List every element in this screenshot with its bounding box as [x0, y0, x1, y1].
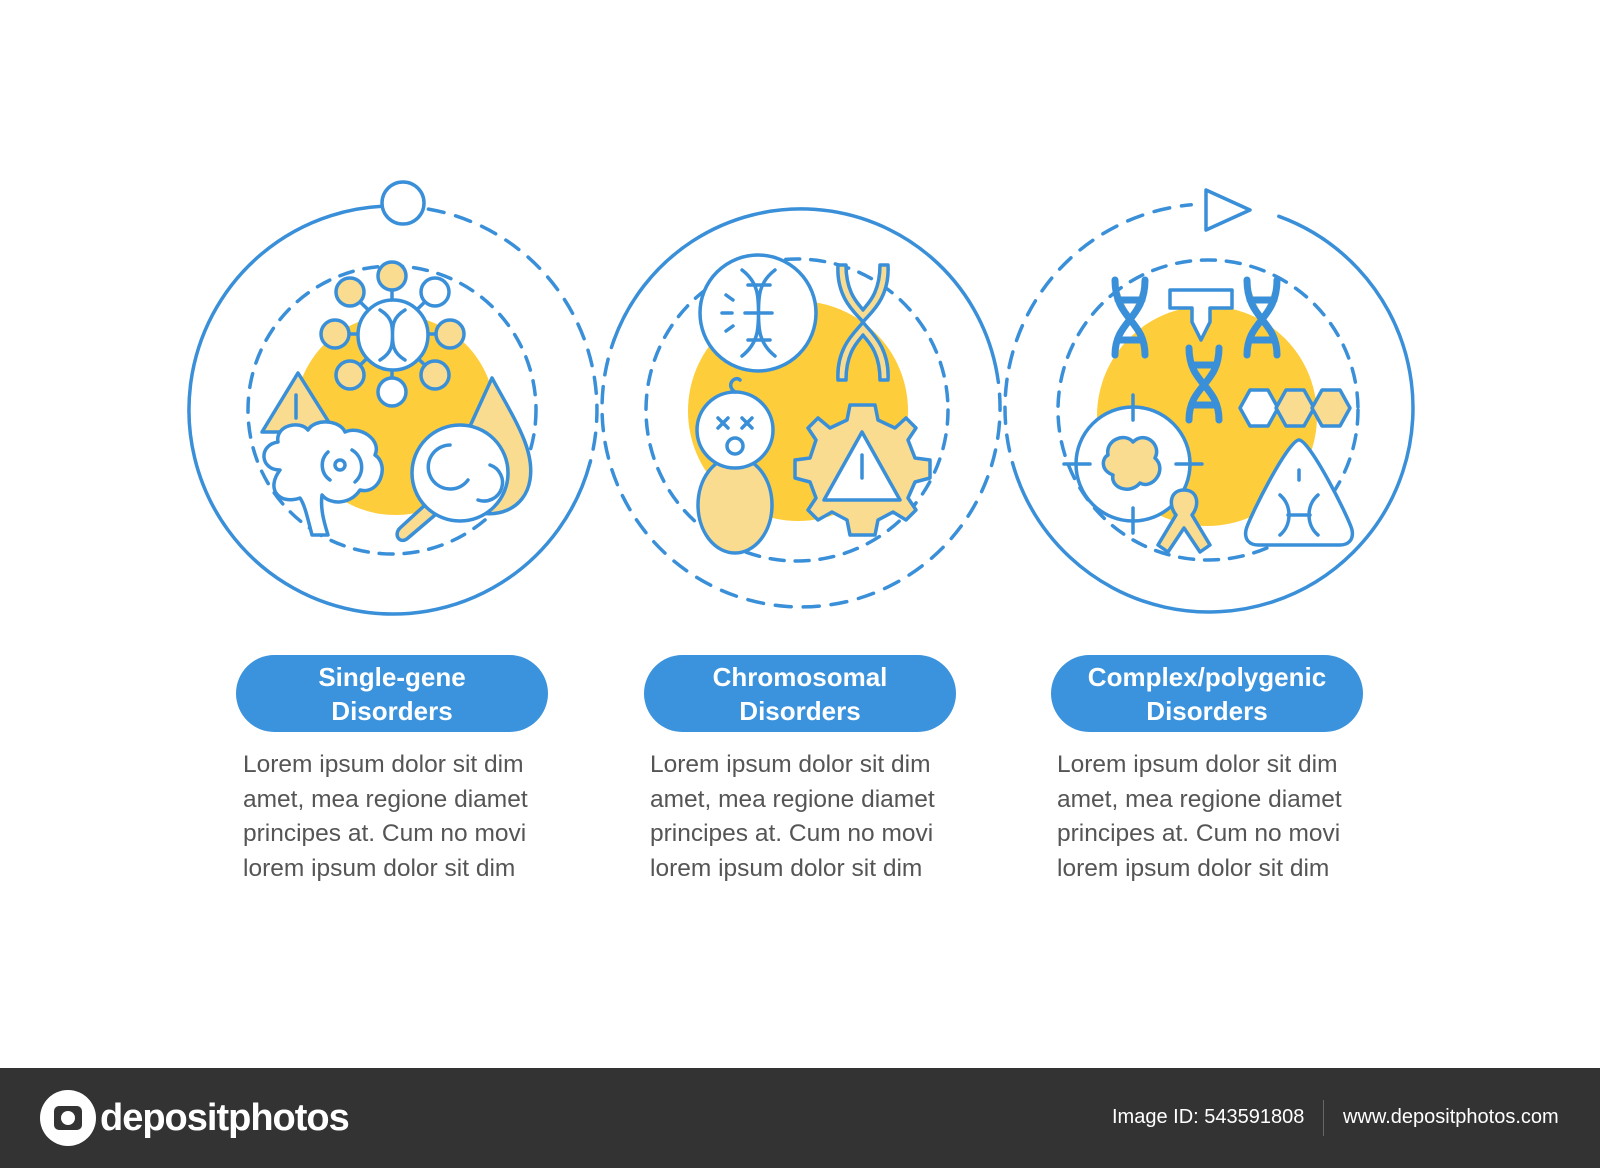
panel 3 circle	[1005, 190, 1413, 612]
logo text: depositphotos	[100, 1097, 349, 1139]
icon: baby	[697, 379, 773, 553]
pill: Single-gene Disorders: Disorders	[331, 696, 453, 726]
icon: logo camera	[40, 1090, 96, 1146]
image id: Image ID: 543591808	[1112, 1106, 1304, 1128]
icon: chromosome	[838, 265, 888, 380]
pill: Complex/polygenic Disorders: Complex/polygenic	[1088, 662, 1326, 692]
icon: DNA circle	[700, 255, 816, 371]
icon: magnifier on drop	[397, 378, 531, 540]
pill: Complex/polygenic Disorders: Disorders	[1146, 696, 1268, 726]
icon: warning and brain	[262, 373, 382, 535]
pill: Complex/polygenic Disorders	[1051, 655, 1363, 732]
pill: Single-gene Disorders: Single-gene	[318, 662, 466, 692]
icon: gene network	[321, 262, 464, 406]
pill: Chromosomal Disorders: Chromosomal	[713, 662, 887, 692]
pill: Single-gene Disorders	[236, 655, 548, 732]
panel 2 circle	[602, 209, 1000, 607]
text block 2: Lorem ipsum dolor sit dim amet, mea regione diamet principes at. Cum no movi lorem ipsum dolor sit dim	[650, 751, 935, 882]
icon: gear warning	[795, 405, 930, 535]
icon: DNA editing	[1115, 280, 1277, 420]
website: www.depositphotos.com	[1343, 1106, 1559, 1128]
pill: Chromosomal Disorders	[644, 655, 956, 732]
icon: hexagons	[1240, 390, 1350, 426]
icon: DNA triangle	[1246, 440, 1352, 545]
icon: ribbon	[1158, 490, 1210, 552]
icon: target tumor	[1064, 395, 1202, 533]
text block 1: Lorem ipsum dolor sit dim amet, mea regione diamet principes at. Cum no movi lorem ipsum dolor sit dim	[243, 751, 528, 882]
pill: Chromosomal Disorders: Disorders	[739, 696, 861, 726]
panel 1 circle	[189, 182, 597, 614]
text block 3: Lorem ipsum dolor sit dim amet, mea regione diamet principes at. Cum no movi lorem ipsum dolor sit dim	[1057, 751, 1342, 882]
footer bar	[0, 1068, 1600, 1168]
